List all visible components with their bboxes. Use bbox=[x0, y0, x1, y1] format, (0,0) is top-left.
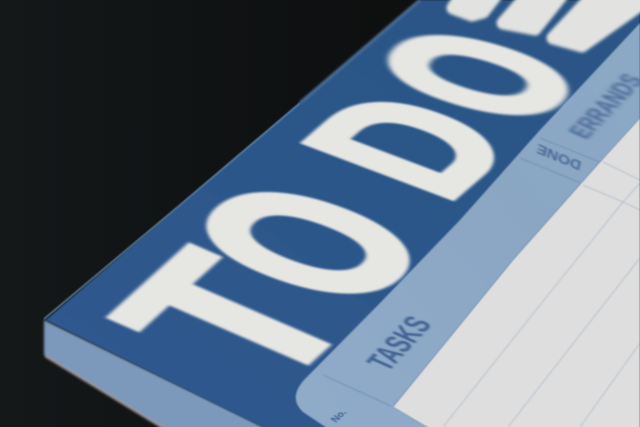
tab: third bbox=[553, 0, 640, 46]
pale blue header strip bbox=[296, 23, 640, 427]
label: DONE: DONE bbox=[535, 140, 583, 172]
paper grid area bbox=[393, 118, 640, 427]
strip lower border bbox=[393, 162, 600, 407]
heading letter T: T bbox=[57, 221, 409, 413]
tab: second bbox=[503, 0, 566, 29]
strip separators bbox=[323, 138, 600, 406]
notepad side edge bbox=[44, 320, 270, 427]
ruled lines bbox=[443, 162, 640, 427]
label: TASKS: TASKS bbox=[360, 312, 440, 376]
label: No.: No. bbox=[329, 408, 350, 425]
top tabs bbox=[453, 0, 640, 46]
heading letter D: D bbox=[253, 68, 564, 221]
heading letter O second: O bbox=[327, 7, 629, 143]
heading letter O: O bbox=[132, 155, 485, 331]
tab: first bbox=[453, 0, 500, 15]
cover top edge highlight bbox=[44, 0, 420, 319]
